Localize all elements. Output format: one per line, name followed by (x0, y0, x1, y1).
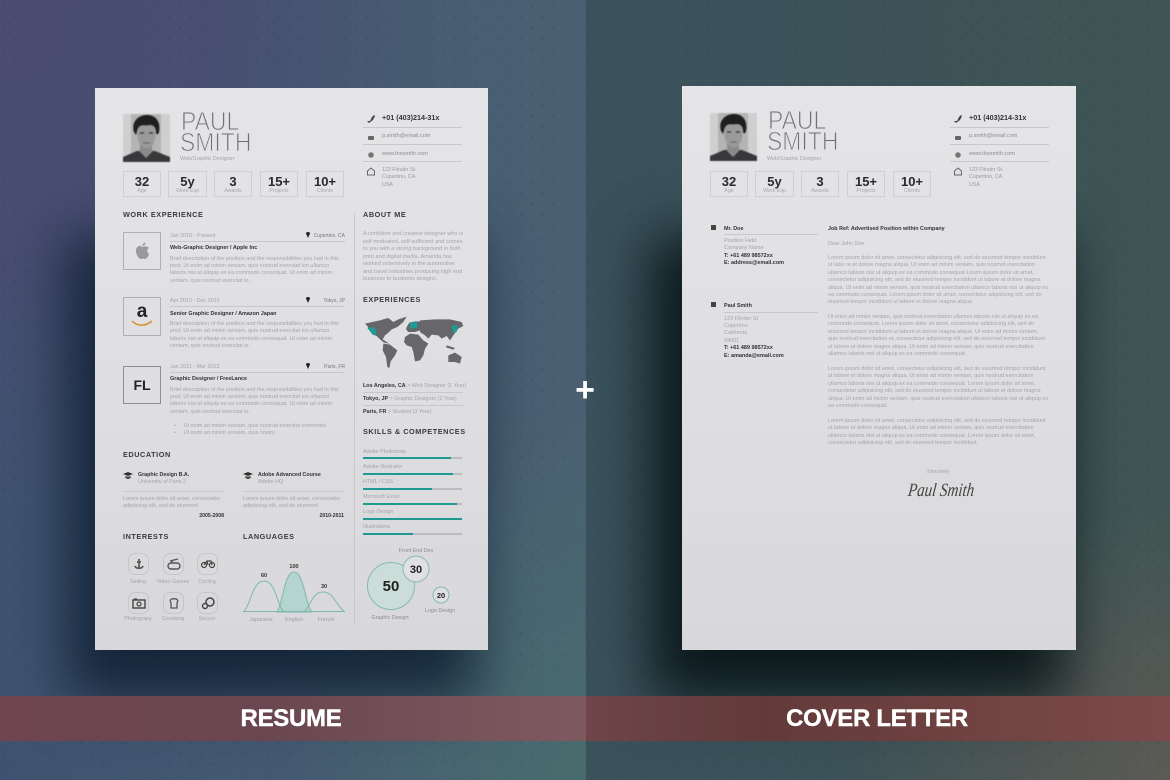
closing: Sincerely (927, 469, 949, 475)
values (261, 564, 327, 590)
website: www.thesmith.com (382, 151, 428, 157)
location: Paris, FR (324, 364, 345, 370)
recipient details: Position Held (724, 238, 756, 244)
stat: clients: 10+ (901, 174, 923, 189)
address: USA (382, 182, 393, 188)
bubble labels (371, 548, 455, 621)
label: Microsoft Excel (363, 494, 400, 500)
stat: age (123, 171, 161, 197)
stat: age: Age (724, 188, 734, 194)
language names: French (318, 617, 334, 623)
stat: projects: Projects (269, 188, 289, 194)
about me text: self-motivated, self-sufficient and comes (363, 238, 462, 244)
sender details: T: +61 489 98572xx (724, 345, 773, 351)
recipient block (711, 225, 818, 266)
date: Jan 2011 - Mar 2013 (170, 364, 219, 370)
address: Cupertino, CA (969, 174, 1002, 180)
paragraph 2: eiusmod tempor incididunt ut labore et dolore magna aliqua. Ut enim ad minim veniam, (828, 329, 1038, 335)
language names: Japanese (249, 617, 273, 623)
front end bubble: 30 (410, 564, 422, 576)
icon: cap (243, 472, 253, 479)
sender details: California (724, 330, 747, 336)
heading: skills: SKILLS & COMPETENCES (363, 427, 466, 436)
label: Video Games (157, 579, 189, 585)
shadow: resume (66, 235, 476, 700)
heading: education: EDUCATION (123, 450, 171, 459)
last name: SMITH (180, 129, 251, 157)
heading: about me: ABOUT ME (363, 210, 406, 219)
school: University of Paris 2 (138, 479, 186, 485)
english area (277, 572, 312, 612)
paragraph 1: consectetur adipisicing elit, sed do eiusmod tempor incididunt ut labore et dolore magna (828, 277, 1040, 283)
sender block (711, 302, 818, 359)
paragraph 4: Lorem ipsum dolor sit amet, consectetur adipisicing elit, sed do eiusmod tempor incididunt (828, 418, 1046, 424)
paragraph 4: consectetur adipisicing elit, sed do eiusmod tempor incididunt. (828, 440, 978, 446)
paragraph 1: eiusmod tempor incididunt ut labore et dolore magna aliqua. (828, 299, 973, 305)
label: Photograpy (124, 616, 152, 622)
sender name: Paul Smith (724, 303, 752, 309)
photo (709, 112, 758, 162)
description: Brief description of the position and the responsibilities you had in this (170, 256, 339, 262)
stat: clients: 10+ (314, 174, 336, 189)
education 2 (243, 472, 344, 519)
bar (363, 518, 462, 520)
bubble chart (367, 548, 455, 621)
bar (363, 457, 462, 459)
paragraph 3: ea commodo consequat. (828, 403, 888, 409)
description: laboris nisi ut aliquip ex ea commodo consequat. Ut enim ad minim (170, 401, 332, 407)
bar (363, 502, 462, 504)
paragraph 1: ullamco laboris nisi ut aliquip ex ea commodo consequat.Lorem ipsum dolor sit amet, (828, 270, 1034, 276)
description: Lorem ipsum dolor sit amet, consectetur (243, 496, 340, 502)
recipient details (724, 238, 784, 266)
bar (363, 532, 462, 534)
title: Adobe Advanced Course (258, 472, 321, 478)
paragraph 1: Lorem ipsum dolor sit amet, consectetur adipisicing elit, sed do eiusmod tempor incididunt (828, 255, 1046, 261)
recipient details: T: +61 489 98572xx (724, 253, 773, 259)
address (969, 167, 1003, 188)
band: resume (0, 696, 586, 741)
letter body (828, 225, 1050, 545)
description: veniam, quis nostrud exercitat io. (170, 343, 250, 349)
about me text: A confident and creative designer who is (363, 231, 463, 237)
stat: awards: Awards (811, 188, 829, 194)
email: p.smith@email.com (382, 133, 430, 139)
stat: work experience: Work Exp (763, 188, 786, 194)
photo (122, 114, 171, 163)
about me text: worked extensively in the automotive (363, 261, 454, 267)
label: Coocking (162, 616, 184, 622)
bubble labels: Graphic Design (371, 615, 409, 621)
title: Graphic Design B.A. (138, 472, 189, 478)
sender details: 94001 (724, 338, 739, 344)
bar (363, 488, 462, 490)
bullets: • Ut enim ad minim veniam, quis nostrud exercitat commodo. (174, 423, 327, 429)
job: apple (123, 232, 345, 284)
icon: soccer (197, 592, 218, 614)
logo: FL: FL (133, 377, 151, 393)
label: Adobe Photoshop (363, 449, 406, 455)
label: Logo Design (363, 509, 393, 515)
about me text: and travel industries producing high end (363, 268, 462, 274)
about me text: print and digital media. Amanda has (363, 254, 452, 260)
japanese and french curves (243, 581, 345, 612)
about me text: business to business designs. (363, 276, 437, 282)
skill bars (363, 449, 462, 535)
stat: clients: Clients (317, 188, 333, 194)
icon: photography (128, 592, 149, 614)
phone: +01 (403)214-31x (969, 113, 1026, 122)
stat: clients (893, 171, 931, 197)
phone: +01 (403)214-31x (382, 113, 439, 122)
role: Web-Graphic Designer / Apple Inc (170, 245, 257, 251)
icon: sailing (128, 553, 149, 575)
description (170, 321, 339, 349)
bullet (711, 302, 716, 307)
contact block (950, 113, 1049, 188)
paragraph 2: Ut enim ad minim veniam, quis nostrud exercitation ullamco laboris nisi ut aliquip ex ea (828, 314, 1038, 320)
logo: amazon (123, 297, 161, 336)
paragraph 2: commodo consequat. Lorem ipsum dolor sit amet, consectetur adipisicing elit, sed do (828, 321, 1034, 327)
label: Cycling (198, 579, 216, 585)
about me text (363, 231, 463, 282)
paragraph 2: ullamco laboris nisi ut aliquip ex ea commodo consequat. (828, 351, 966, 357)
band: cover letter (586, 696, 1170, 741)
logo: FL (123, 366, 161, 404)
stat: work experience (168, 171, 207, 197)
description: Lorem ipsum dolor sit amet, consectetur (123, 496, 220, 502)
school: Adobe HQ (258, 479, 283, 485)
stat: clients (306, 171, 344, 197)
heading: languages: LANGUAGES (243, 532, 295, 541)
paragraph 4: ut labore et dolore magna aliqua. Ut enim ad minim veniam, quis nostrud exercitation (828, 425, 1034, 431)
description: laboris nisi ut aliquip ex ea commodo consequat. Ut enim ad minim (170, 336, 332, 342)
paragraph 1: ut labo re et dolore magna aliqua. Ut enim ad minim veniam, quis nostrud exercitation (828, 262, 1035, 268)
sender details: 123 Flinder St (724, 316, 758, 322)
paragraph 2 (828, 314, 1045, 358)
contact icons (954, 115, 962, 176)
stat: work experience: 5y (180, 174, 195, 189)
contact icons (367, 115, 375, 176)
last name: SMITH (767, 128, 838, 156)
language names (249, 617, 334, 623)
name (767, 107, 838, 162)
signature: Paul Smith (907, 481, 975, 501)
recipient details: E: address@email.com (724, 260, 784, 266)
stat: projects (847, 171, 885, 197)
bar (363, 472, 462, 474)
location: Tokyo, JP (323, 298, 345, 304)
location: Cupertino, CA (314, 233, 345, 239)
heading: work experience: WORK EXPERIENCE (123, 210, 203, 219)
stat: age: 32 (722, 174, 736, 189)
sender details: Cupertino (724, 323, 748, 329)
stat: awards: 3 (816, 174, 824, 189)
website: www.thesmith.com (969, 151, 1015, 157)
stat: awards (801, 171, 839, 197)
background: left panel (0, 0, 586, 780)
description (170, 386, 339, 415)
description (243, 496, 340, 509)
recipient details: Company Name (724, 245, 764, 251)
paragraph 3: Lorem ipsum dolor sit amet, consectetur adipisicing elit, sed do eiusmod tempor incididunt (828, 366, 1046, 372)
plus sign: + (575, 371, 595, 409)
address: 123 Flinder St. (382, 167, 416, 173)
paragraph 1: ea commodo consequat. Lorem ipsum dolor sit amet, consectetur adipisicing elit, sed do (828, 292, 1042, 298)
paragraph 3: aliqua. Ut enim ad minim veniam, quis nostrud exercitation ullamco laboris nisi ut aliquip ex (828, 396, 1048, 402)
stat: clients: Clients (904, 188, 920, 194)
language names: English (285, 617, 303, 623)
description: post. Ut enim ad minim veniam, quis nostrud exercitat ion ullamco (170, 263, 329, 269)
paragraph 3 (828, 366, 1048, 410)
stat: age (710, 171, 748, 197)
job: freelance (123, 363, 345, 436)
role: Senior Graphic Designer / Amazon Japan (170, 311, 276, 317)
bullet (711, 225, 716, 230)
label: Soccer (199, 616, 215, 622)
paragraph 3: ullamco laboris nisi ut aliquip ex ea commodo consequat. Lorem ipsum dolor sit amet, (828, 381, 1035, 387)
paragraph 2: quis nostrud exercitation et, consectetur adipisicing elit, sed do eiusmod tempor incididunt (828, 336, 1045, 342)
shadow: cover letter (650, 235, 1065, 700)
pin (306, 297, 310, 303)
description (123, 496, 220, 509)
job title: Web/Graphic Designer (180, 156, 234, 162)
paragraph 3: ut labore et dolore magna aliqua. Ut enim ad minim veniam, quis nostrud exercitation (828, 373, 1034, 379)
values: 60 (261, 573, 267, 579)
first name: PAUL (768, 107, 826, 135)
los angeles: Los Angeles, CA > Web Designer (1 Year) (363, 383, 466, 389)
bullets: • Ut enim ad minim veniam, quis nostru (174, 430, 275, 436)
icon: cooking (163, 592, 184, 614)
paragraph 1 (828, 255, 1048, 307)
stat: projects: Projects (856, 188, 876, 194)
stat: age: Age (137, 188, 147, 194)
role: Graphic Designer / FreeLance (170, 376, 247, 382)
job title: Web/Graphic Designer (767, 156, 821, 162)
description: post. Ut enim ad minim veniam, quis nostrud exercitat ion ullamco (170, 328, 329, 334)
bubble labels: Front End Dev (399, 548, 434, 554)
values: 30 (321, 584, 327, 590)
paragraph 2: ut labore et dolore magna aliqua. Ut enim ad minim veniam, quis nostrud exercitation (828, 344, 1034, 350)
graphic design bubble: 50 (383, 578, 399, 595)
stat: projects (260, 171, 298, 197)
address (382, 167, 416, 188)
sender details (724, 316, 784, 359)
tokyo: Tokyo, JP > Graphic Designer (2 Year) (363, 396, 457, 402)
interests grid (124, 553, 218, 622)
address: USA (969, 182, 980, 188)
description: Brief description of the position and the responsibilities you had in this (170, 321, 339, 327)
description: adipiscing elit, sed do eiusmod (243, 503, 317, 509)
years: 2005-2008 (199, 513, 224, 519)
recipient name: Mr. Doe (724, 226, 743, 232)
logo: amazon: a (137, 301, 147, 322)
paragraph 1: aliqua. Ut enim ad minim veniam, quis nostrud exercitation ullamco laboris nisi ut aliquip ex (828, 285, 1048, 291)
education 1 (123, 472, 224, 519)
address: 123 Flinder St. (969, 167, 1003, 173)
job: amazon (123, 297, 345, 349)
stat: work experience: 5y (767, 174, 782, 189)
stat: awards (214, 171, 252, 197)
panel: cover letter document (682, 86, 1076, 650)
location list (363, 383, 466, 415)
stat: awards: Awards (224, 188, 242, 194)
stat: projects: 15+ (855, 174, 877, 189)
subject: Job Ref: Advertised Position within Company (828, 226, 945, 232)
pin (306, 232, 310, 238)
description: laboris nisi ut aliquip ex ea commodo consequat. Ut enim ad minim (170, 270, 332, 276)
years: 2010-2011 (319, 513, 344, 519)
contact block (363, 113, 462, 188)
paragraph 4: ullamco laboris nisi ut aliquip ex ea commodo consequat. Lorem ipsum dolor sit amet, (828, 433, 1035, 439)
languages chart (242, 564, 346, 623)
paragraph 3: consectetur adipisicing elit, sed do eiusmod tempor incididunt ut labore et dolore magna (828, 388, 1040, 394)
label: Sailing (130, 579, 146, 585)
address: Cupertino, CA (382, 174, 415, 180)
paragraph 4 (828, 418, 1046, 448)
background: right panel (586, 0, 1170, 780)
stat: age: 32 (135, 174, 149, 189)
description: veniam, quis nostrud exercitat io. (170, 278, 250, 284)
description: Brief description of the position and the responsibilities you had in this (170, 386, 339, 392)
description: veniam, quis nostrud exercitat io. (170, 409, 250, 415)
email: p.smith@email.com (969, 133, 1017, 139)
paris: Paris, FR > Student (3 Year) (363, 409, 431, 415)
icon: cap (123, 472, 133, 479)
stat: work experience (755, 171, 794, 197)
logo: apple (123, 232, 161, 270)
sender details: E: amanda@email.com (724, 353, 784, 359)
name (180, 108, 251, 162)
about me text: to you with a strong background in both (363, 246, 461, 252)
label: HTML / CSS (363, 479, 393, 485)
label: cover letter: COVER LETTER (786, 705, 968, 732)
panel: resume document (95, 88, 488, 650)
stat: projects: 15+ (268, 174, 290, 189)
pin (306, 363, 310, 369)
date: Apr 2013 - Dec 2015 (170, 298, 220, 304)
stat: awards: 3 (229, 174, 237, 189)
values: 100 (289, 564, 299, 570)
description: adipiscing elit, sed do eiusmod (123, 503, 197, 509)
bubble labels: Logo Design (425, 608, 455, 614)
heading: experiences: EXPERIENCES (363, 295, 421, 304)
world map (365, 316, 464, 368)
icon: video games (163, 553, 184, 575)
label: Illustrations (363, 524, 390, 530)
logo design bubble: 20 (437, 591, 445, 600)
label: Adobe Illustrator (363, 464, 402, 470)
description (170, 256, 339, 284)
label: resume: RESUME (241, 705, 341, 732)
bullets (174, 423, 327, 436)
description: post. Ut enim ad minim veniam, quis nostrud exercitat ion ullamco (170, 394, 329, 400)
date: Jan 2016 - Present (170, 233, 216, 239)
greeting: Dear John Doe (828, 241, 864, 247)
stat: work experience: Work Exp (176, 188, 199, 194)
icon: cycling (197, 553, 218, 575)
first name: PAUL (181, 108, 239, 136)
heading: interests: INTERESTS (123, 532, 169, 541)
